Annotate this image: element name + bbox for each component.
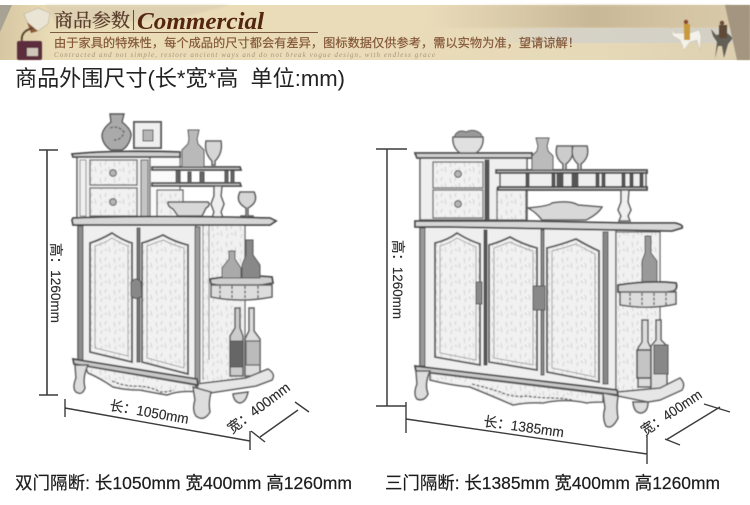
cabinet lower body — [72, 216, 276, 384]
heading: 商品外围尺寸(长*宽*高 单位:mm) — [15, 66, 345, 91]
length label: 长：1050mm — [108, 397, 190, 427]
wine glass — [206, 141, 221, 165]
width label: 宽：400mm — [638, 386, 705, 438]
dimension: three-door length — [406, 402, 647, 464]
dimension: three-door width — [638, 386, 730, 445]
dimension: two-door height — [39, 150, 64, 395]
left leg — [74, 365, 88, 393]
base plate and plinth — [73, 359, 273, 395]
left leg — [415, 371, 430, 400]
bottle on shelf — [642, 236, 657, 287]
door carvings — [476, 282, 545, 310]
door carving — [131, 279, 142, 298]
icon: tree trunk — [725, 5, 750, 60]
wine glasses — [556, 146, 588, 170]
right door — [142, 235, 188, 374]
banner title separator — [133, 10, 134, 30]
door three — [547, 239, 599, 382]
height label: 高：1260mm — [390, 240, 406, 319]
width label: 宽：400mm — [224, 379, 293, 436]
decanter — [182, 130, 204, 167]
small bottles — [222, 240, 260, 278]
banner rule — [50, 32, 318, 33]
icon: gramophone — [17, 8, 50, 60]
banner notice: 由于家具的特殊性，每个成品的尺寸都会有差异，图标数据仅供参考，需以实物为准，望请谅解！ — [54, 35, 580, 50]
caption: two-door: 双门隔断: 长1050mm 宽400mm 高1260mm — [15, 473, 352, 493]
door one — [435, 233, 480, 365]
rear leg — [633, 402, 648, 413]
height label: 高：1260mm — [48, 243, 64, 323]
small round shelf — [210, 276, 273, 300]
banner english title: Commercial — [137, 9, 264, 35]
wine bottles — [230, 308, 260, 376]
banner title: 商品参数 — [54, 11, 130, 32]
picture frame — [134, 122, 161, 148]
shelf unit — [496, 170, 647, 221]
cabinet upper body — [72, 151, 183, 218]
centre leg — [603, 393, 618, 427]
caption: three-door: 三门隔断: 长1385mm 宽400mm 高1260mm — [385, 473, 720, 493]
centre leg — [193, 387, 211, 418]
fruit dish — [528, 202, 602, 220]
fruit bowl on top — [453, 130, 483, 153]
tiered shelves — [152, 167, 241, 218]
decanter — [532, 138, 553, 170]
vase — [102, 114, 131, 150]
base plate and plinth — [415, 366, 684, 405]
brandy glass — [238, 192, 256, 217]
left door — [90, 233, 132, 362]
panel: three-door cabinet — [415, 130, 684, 427]
small round shelf — [618, 282, 677, 307]
dimension: three-door height — [376, 149, 407, 406]
rear leg — [233, 392, 248, 403]
dimension: two-door length — [65, 397, 250, 450]
banner — [0, 5, 750, 60]
bowl — [168, 202, 209, 216]
door two — [489, 237, 537, 370]
dimension: two-door width — [224, 379, 309, 442]
banner script line: Contracted and not simple, restore ancient ways and do not break vogue design, with endless grace — [54, 51, 435, 59]
cabinet upper body — [415, 153, 532, 220]
cabinet lower body — [415, 221, 682, 392]
wine bottles — [637, 320, 668, 389]
length label: 长：1385mm — [483, 413, 565, 440]
panel: two-door cabinet — [72, 114, 276, 418]
icon: horse riders — [670, 20, 733, 59]
